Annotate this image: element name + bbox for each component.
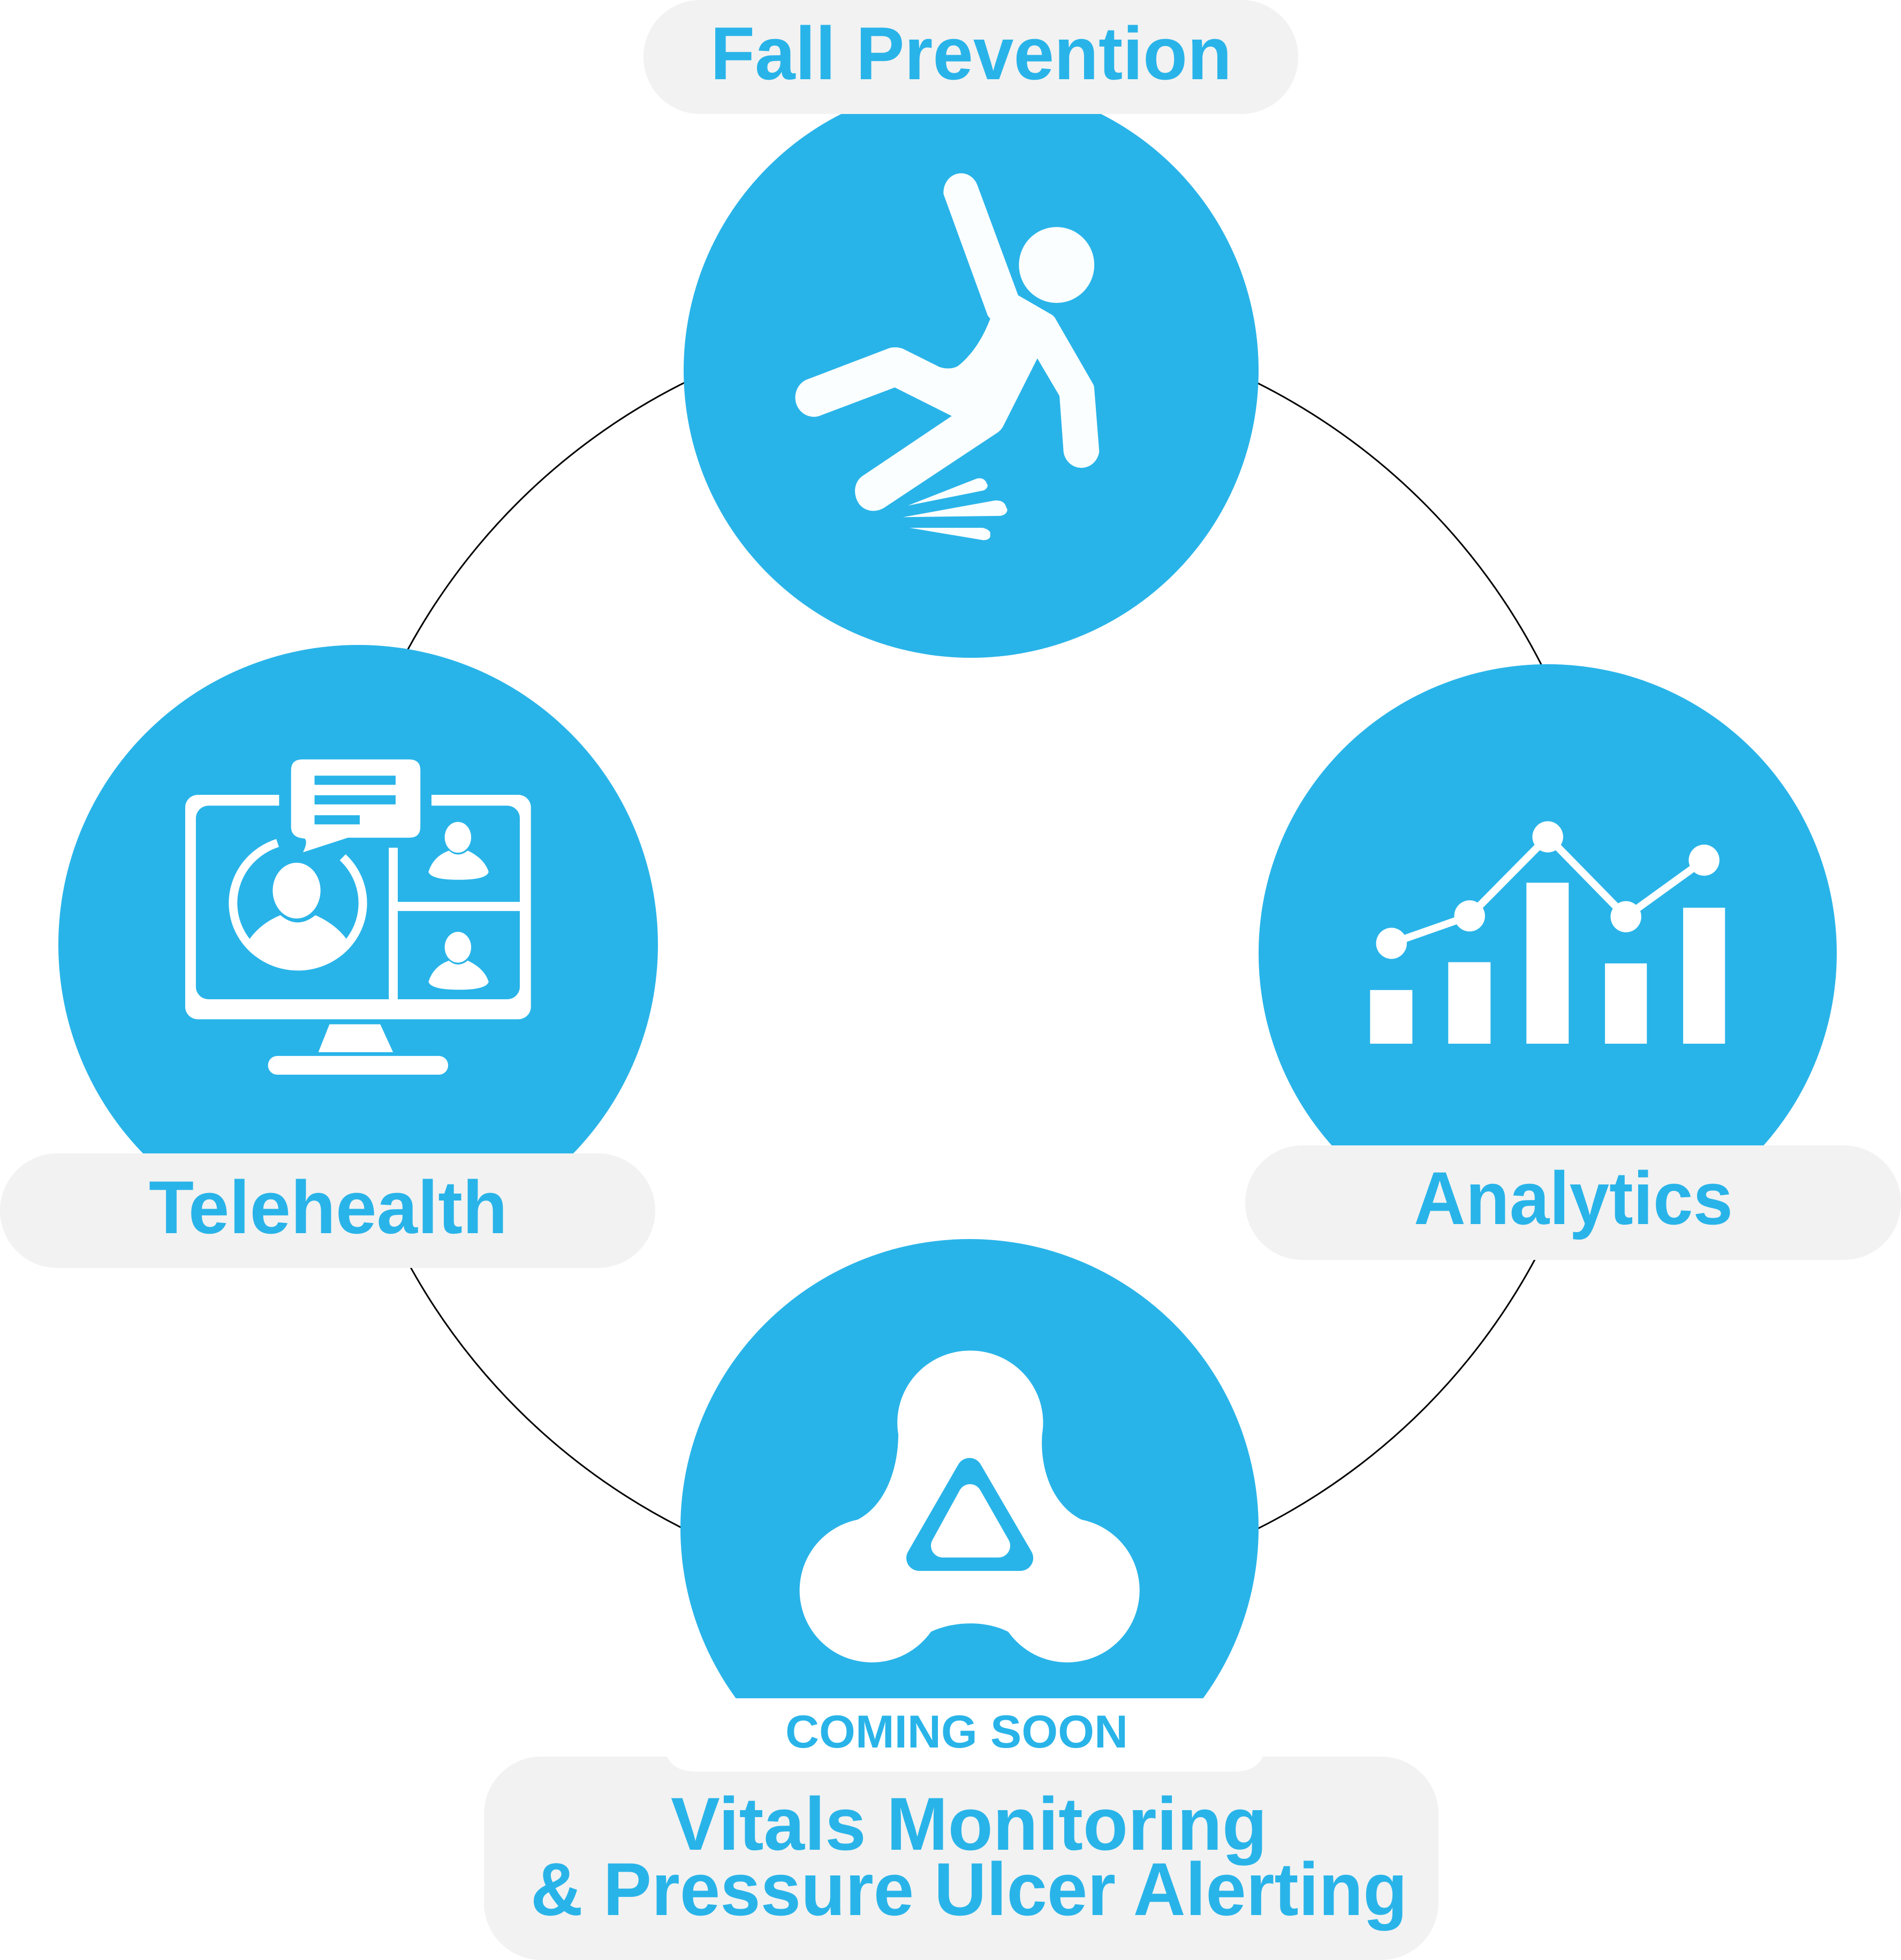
icon: sensor blob	[800, 1350, 1140, 1662]
heading: pressure ulcer alerting line two: & Pressure Ulcer Alerting	[531, 1847, 1407, 1931]
heading: fall prevention: Fall Prevention	[710, 11, 1232, 95]
analytics circle	[1259, 664, 1837, 1242]
panel: vitals monitoring	[484, 1239, 1438, 1960]
coming soon white tab	[664, 1698, 1266, 1772]
heading: analytics: Analytics	[1414, 1156, 1733, 1240]
icon: bar and line chart	[1370, 821, 1725, 1044]
icon: video call monitor	[185, 759, 531, 1075]
connecting ring	[330, 315, 1611, 1597]
vitals label pill	[484, 1757, 1438, 1960]
analytics label pill	[1245, 1145, 1901, 1260]
icon: falling person	[796, 173, 1099, 540]
icon: triangle outline	[919, 1471, 1020, 1558]
panel: analytics	[1245, 664, 1901, 1260]
vitals circle	[680, 1239, 1259, 1817]
panel: telehealth	[0, 645, 658, 1268]
telehealth label pill	[0, 1153, 655, 1268]
heading: vitals monitoring line one: Vitals Monitoring	[671, 1782, 1267, 1866]
telehealth circle	[58, 645, 658, 1244]
panel: fall prevention	[643, 0, 1298, 658]
badge text: coming soon: COMING SOON	[785, 1706, 1128, 1758]
fall prevention circle	[684, 83, 1259, 658]
heading: telehealth: Telehealth	[149, 1165, 508, 1249]
fall prevention label pill	[643, 0, 1298, 114]
